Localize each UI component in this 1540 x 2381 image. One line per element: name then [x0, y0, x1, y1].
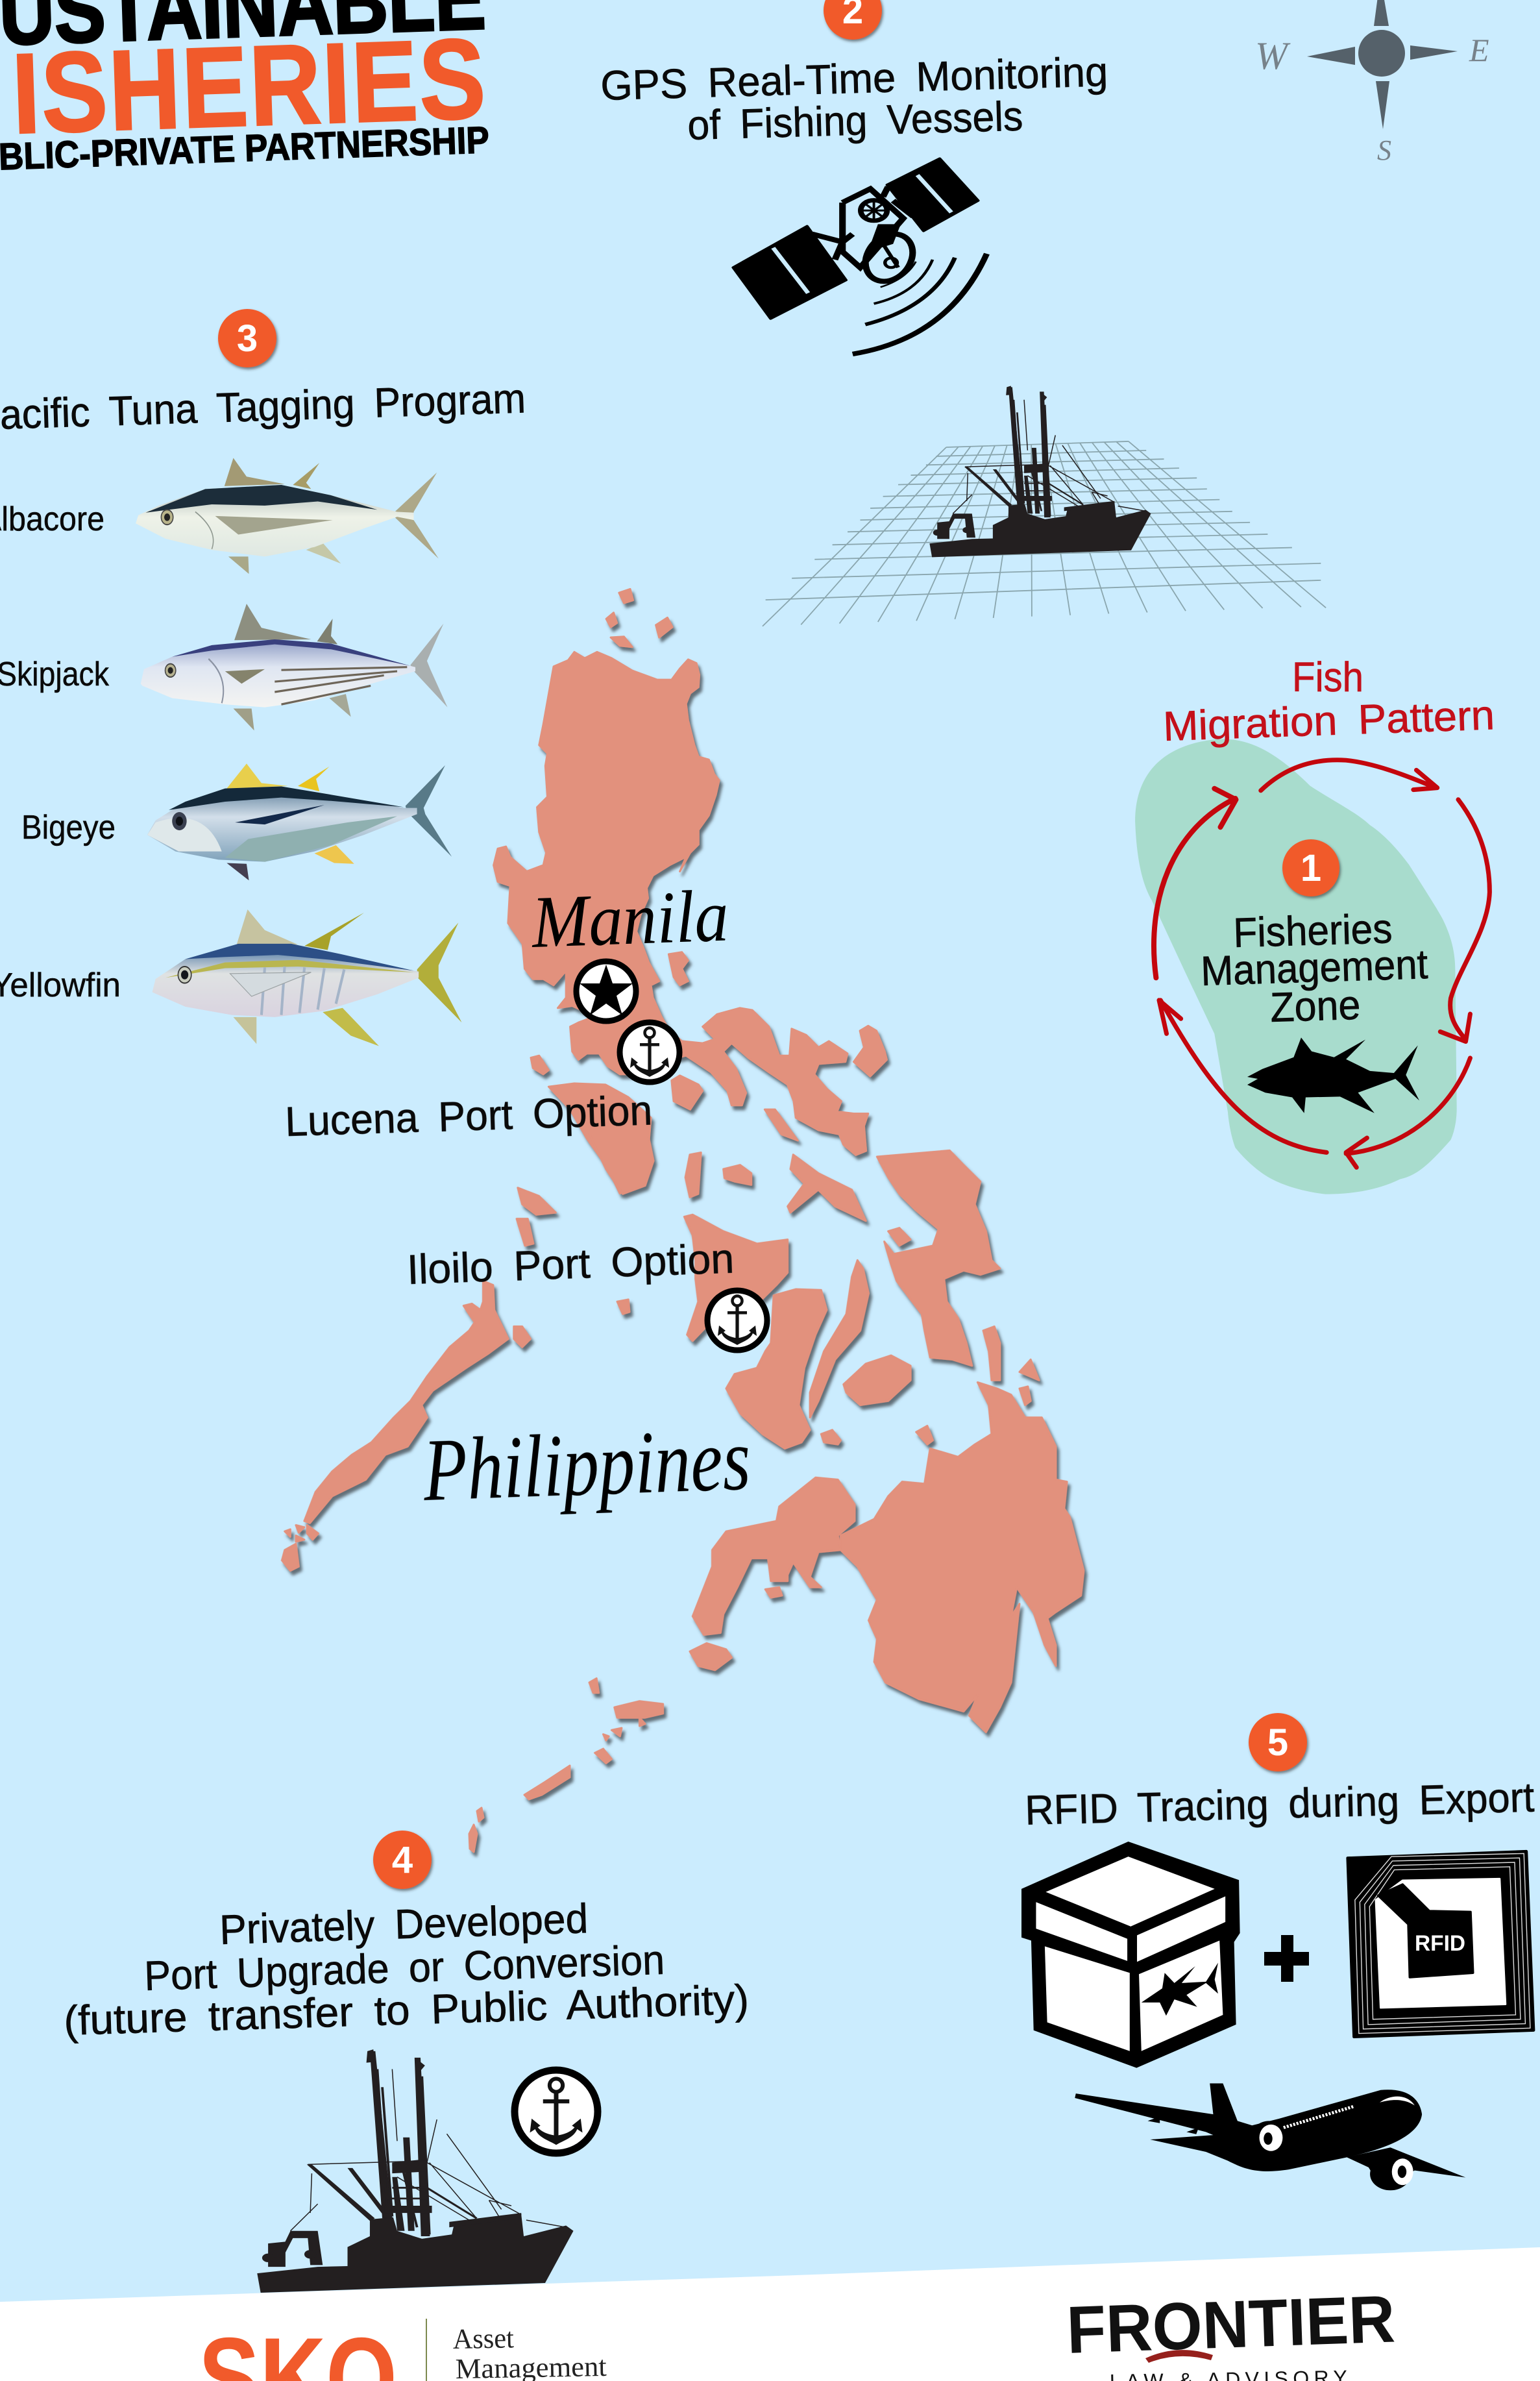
heading: GPS monitoring: GPS Real-Time Monitoring	[600, 48, 1108, 109]
icon: fishing vessel	[257, 2049, 574, 2293]
southern islet	[469, 1825, 477, 1852]
icon: plus	[1264, 1935, 1309, 1982]
icon: tuna box	[1021, 1842, 1240, 2068]
icon: compass	[1255, 0, 1489, 166]
icon: tuna silhouette	[1247, 1037, 1419, 1113]
marker: Iloilo anchor	[707, 1290, 767, 1350]
heading: migration pattern: Migration Pattern	[1162, 691, 1495, 750]
chart: vessel monitoring grid	[763, 441, 1326, 626]
zone label	[1200, 905, 1428, 1031]
heading: port upgrade: Port Upgrade or Conversion	[143, 1936, 665, 1999]
heading: port upgrade: (future transfer to Public Authority)	[63, 1976, 750, 2044]
fish: albacore	[136, 458, 439, 574]
badge 3: 3	[237, 317, 258, 360]
northern Luzon and Bicol islands	[494, 589, 887, 1194]
icon: compass: W	[1255, 34, 1291, 77]
heading: port upgrade	[63, 1895, 750, 2044]
fish: yellowfin	[153, 909, 461, 1046]
logo: SKO Asset Management	[199, 2315, 607, 2381]
icon: RFID tag	[1348, 1851, 1534, 2037]
badge 3	[218, 309, 276, 367]
migration arrows	[1154, 760, 1489, 1167]
map: Philippines	[282, 589, 1084, 1852]
icon: satellite	[733, 158, 986, 354]
label: Manila: Manila	[530, 875, 730, 963]
small southern islet	[477, 1808, 483, 1821]
heading: migration pattern: Fish	[1292, 654, 1363, 700]
icon: compass: E	[1469, 32, 1489, 68]
badge 5	[1249, 1713, 1307, 1771]
icon: port anchor	[515, 2070, 598, 2153]
title: ISHERIES	[10, 15, 489, 157]
Tawi-Tawi island	[524, 1766, 570, 1799]
badge 5: 5	[1267, 1721, 1288, 1764]
icon: fishing vessel on grid	[929, 386, 1151, 557]
label: Iloilo port: Iloilo Port Option	[406, 1235, 735, 1293]
icon: airplane	[1075, 2083, 1465, 2190]
icon: compass: S	[1377, 134, 1391, 166]
marker: Manila star	[576, 961, 636, 1021]
badge 4: 4	[392, 1839, 413, 1881]
zone label: Fisheries	[1232, 905, 1393, 956]
heading: GPS monitoring	[600, 48, 1108, 149]
zone label: Management	[1200, 941, 1428, 994]
badge 2	[824, 0, 882, 40]
zone blob	[1135, 739, 1457, 1194]
heading: port upgrade: Privately Developed	[219, 1895, 589, 1953]
logo: Frontier Law & Advisory: FRONTIER	[1066, 2281, 1396, 2367]
badge 4	[373, 1831, 432, 1889]
zone label: Zone	[1269, 981, 1361, 1031]
heading: migration pattern	[1162, 654, 1495, 750]
heading: RFID tracing: RFID Tracing during Export	[1024, 1773, 1535, 1834]
fish: skipjack	[141, 604, 448, 730]
badge 1	[1282, 839, 1339, 896]
label: bigeye: Bigeye	[21, 809, 116, 846]
label: Lucena port: Lucena Port Option	[284, 1087, 653, 1145]
marker: Lucena anchor	[620, 1022, 679, 1082]
badge 1: 1	[1301, 847, 1321, 889]
label: Philippines: Philippines	[421, 1409, 752, 1520]
heading: GPS monitoring: of Fishing Vessels	[687, 93, 1023, 149]
label: RFID chip: RFID	[1415, 1931, 1465, 1956]
footer white band	[0, 2247, 1540, 2381]
logo: SKO Asset Management: Asset	[452, 2322, 514, 2355]
fish: bigeye	[147, 763, 452, 880]
label: skipjack: Skipjack	[0, 656, 110, 693]
Visayas, Palawan, Mindanao and Sulu islands	[282, 1134, 1084, 1763]
panel: fisheries management zone	[1135, 654, 1495, 1194]
